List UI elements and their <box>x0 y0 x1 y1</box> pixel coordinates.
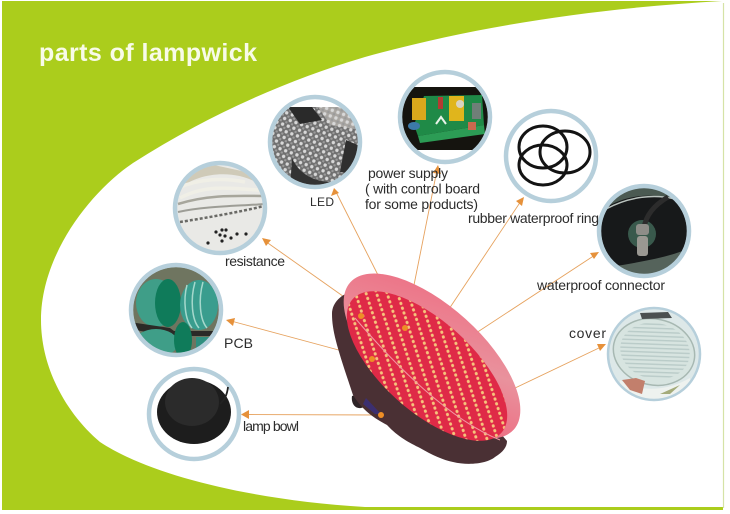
arrow: LED <box>331 188 380 279</box>
lamp dark body <box>332 291 507 464</box>
label: waterproof connector: waterproof connector <box>536 277 665 293</box>
lamp blue clip <box>363 398 381 414</box>
label: resistance: resistance <box>225 253 285 269</box>
label: power supply: for some products) <box>365 196 478 212</box>
label: cover: cover <box>569 325 606 341</box>
arrow lines to parts <box>226 165 606 419</box>
part: lamp bowl photo <box>149 369 239 459</box>
arrow: cover <box>513 344 606 389</box>
label: LED: LED <box>310 195 334 209</box>
lamp outer rim <box>317 245 547 467</box>
arrow: lamp bowl <box>241 410 381 419</box>
part: cover photo <box>607 307 701 401</box>
arrow: connector <box>473 252 599 335</box>
label: rubber waterproof ring: rubber waterproof ring <box>468 210 599 226</box>
lamp red face <box>323 266 531 466</box>
part: power supply photo <box>400 72 490 162</box>
part: resistance photo <box>175 162 265 253</box>
label: power supply: ( with control board <box>365 180 480 196</box>
lamp face seam <box>355 318 500 440</box>
label: power supply <box>365 165 480 212</box>
title: parts of lampwick <box>39 39 257 67</box>
lamp LED dots <box>348 291 506 441</box>
part: PCB photo <box>130 265 222 358</box>
part: waterproof connector photo <box>599 186 690 276</box>
lamp illustration <box>332 274 520 464</box>
arrow: resistance <box>262 238 347 299</box>
arrow: power supply <box>413 165 441 290</box>
part: LED photo <box>270 97 360 190</box>
lamp marker dots <box>358 313 408 418</box>
frame line right <box>722 3 724 508</box>
arrow: rubber ring <box>447 197 524 312</box>
label: power supply: power supply <box>368 165 448 181</box>
lamp knob <box>352 393 372 408</box>
label: PCB: PCB <box>224 335 253 351</box>
part: rubber rings photo <box>506 111 596 201</box>
label: lamp bowl: lamp bowl <box>243 418 299 434</box>
arrow: PCB <box>226 318 372 359</box>
